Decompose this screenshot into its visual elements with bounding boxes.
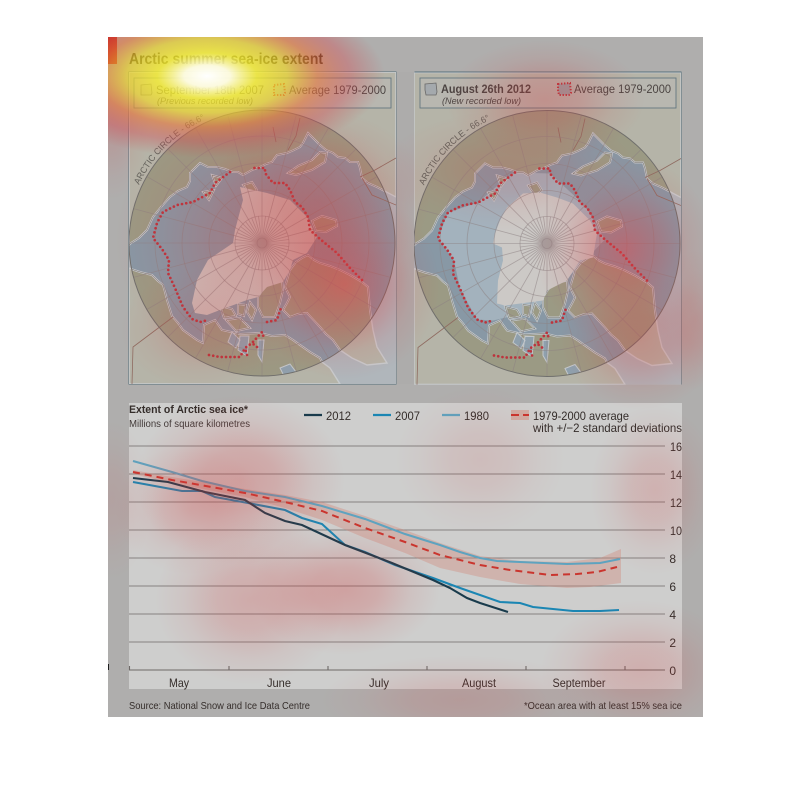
heat hotspot over title: [108, 37, 378, 154]
line: 2007: [133, 482, 619, 611]
veil over maps: [129, 72, 681, 384]
legend 2012: [420, 78, 676, 108]
graticule: [129, 110, 395, 376]
arctic circle: [414, 110, 680, 376]
heatmap overlay: [108, 37, 703, 717]
line: 1979-2000 average: [133, 472, 617, 575]
average extent line: [438, 168, 647, 358]
chart legend: [304, 409, 682, 435]
axis mark: [108, 664, 109, 670]
y axis labels: 4: [669, 608, 676, 622]
red corner tag: [108, 37, 117, 64]
chart subtitle: Millions of square kilometres: [129, 419, 250, 430]
title: Arctic summer sea-ice extent: [129, 51, 324, 68]
line: 1980: [133, 461, 620, 564]
month labels: September: [552, 676, 606, 690]
line: 2012: [133, 478, 508, 612]
chart legend: with +/−2 standard deviations: [532, 421, 682, 435]
legend 2007: (Previous recorded low): [157, 96, 253, 107]
y axis labels: 14: [670, 468, 682, 482]
panel: 2012 map: [414, 72, 682, 384]
month labels: [169, 676, 606, 690]
legend 2012: August 26th 2012: [441, 82, 531, 96]
y axis labels: 2: [669, 636, 676, 650]
infographic: [108, 37, 703, 717]
y axis labels: 16: [670, 440, 682, 454]
month labels: August: [462, 676, 497, 690]
y axis labels: 0: [669, 664, 676, 678]
legend 2007: Average 1979-2000: [289, 83, 386, 97]
legend 2012: (New recorded low): [442, 96, 521, 107]
y axis labels: 6: [669, 580, 676, 594]
panel: line chart: [129, 403, 682, 690]
y axis labels: 12: [670, 496, 682, 510]
month labels: May: [169, 676, 189, 690]
average extent line: [153, 168, 362, 357]
y axis labels: 10: [670, 524, 682, 538]
y axis labels: [669, 440, 682, 678]
page background: [108, 37, 703, 717]
panel: 2007 map: [128, 72, 396, 384]
graticule: [414, 110, 680, 376]
y axis labels: 8: [669, 552, 676, 566]
sea ice 2007: [192, 187, 317, 315]
chart legend: 2007: [395, 409, 420, 423]
legend 2007: September 18th 2007: [156, 83, 264, 97]
grid lines: [129, 446, 665, 670]
legend 2007: [134, 78, 391, 108]
source note: Source: National Snow and Ice Data Centre: [129, 700, 310, 712]
chart legend: 1979-2000 average: [533, 409, 629, 423]
sea ice 2012: [493, 192, 597, 306]
arctic circle label: ARCTIC CIRCLE - 66.6°: [420, 114, 488, 186]
chart title: Extent of Arctic sea ice*: [129, 404, 249, 416]
chart legend: 2012: [326, 409, 351, 423]
legend 2012: Average 1979-2000: [574, 82, 671, 96]
chart legend: 1980: [464, 409, 489, 423]
month labels: June: [267, 676, 291, 690]
arctic circle label: ARCTIC CIRCLE - 66.6°: [134, 114, 202, 185]
footnote: *Ocean area with at least 15% sea ice: [524, 700, 682, 712]
arctic circle: [129, 110, 395, 376]
standard deviation band: [133, 470, 621, 588]
month labels: July: [369, 676, 389, 690]
